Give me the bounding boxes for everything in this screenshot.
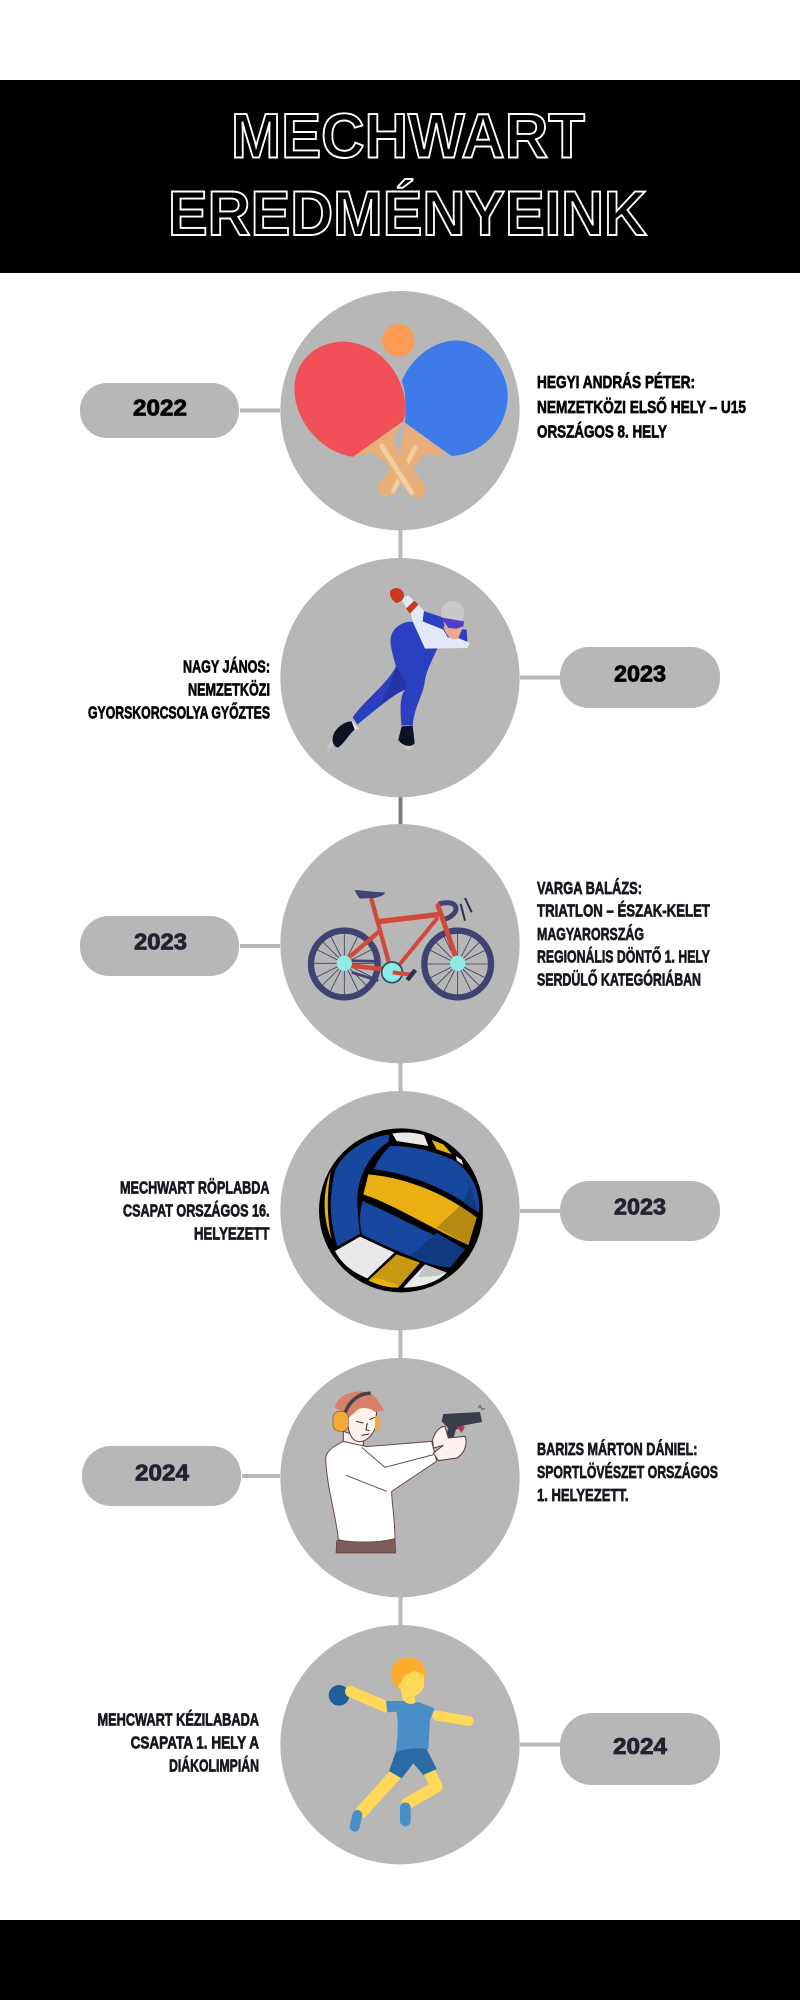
text: Mechwart röplabda: CSAPAT ORSZÁGOS 16. [123,1200,270,1220]
title: EREDMÉNYEINK [168,179,647,249]
title [168,102,647,249]
year pill 2022 [80,383,239,438]
text: Hegyi András Péter: ORSZÁGOS 8. HELY [537,421,667,442]
text: Barizs Márton Dániel: SPORTLÖVÉSZET ORSZÁGOS [537,1461,718,1482]
circle with table tennis icon [280,291,520,530]
text: Varga Balázs: REGIONÁLIS DÖNTŐ 1. HELY [537,946,710,967]
circle with bicycle icon [280,824,520,1063]
text: Mehcwart kézilabada: DIÁKOLIMPIÁN [169,1754,259,1776]
panel: 2023 volleyball [120,1091,720,1330]
year pill 2022: 2022 [133,394,187,420]
text: Nagy János: GYORSKORCSOLYA GYŐZTES [88,702,270,722]
year pill 2023: 2023 [134,928,187,954]
year pill 2023 [560,1181,720,1241]
text: Hegyi András Péter: NEMZETKÖZI ELSŐ HELY – U15 [537,396,746,417]
panel: 2023 triathlon [80,824,710,1063]
circle with handball player icon [280,1625,520,1864]
footer band [0,1920,800,2000]
text: Nagy János [88,656,270,722]
text: Mehcwart kézilabada [98,1708,259,1776]
text: Barizs Márton Dániel: BARIZS MÁRTON DÁNIEL: [537,1438,698,1459]
circle with volleyball icon [280,1091,520,1330]
panel: 2022 table tennis [80,291,746,530]
year pill 2024 [82,1446,241,1506]
year pill 2024: 2024 [613,1733,667,1759]
year pill 2023: 2023 [614,1194,666,1220]
title: MECHWART [231,102,585,172]
text: Mehcwart kézilabada: MEHCWART KÉZILABADA [98,1708,259,1730]
circle with speed skater icon [280,558,520,797]
text: Mechwart röplabda [120,1178,270,1244]
circle with shooter icon [280,1358,520,1597]
text: Varga Balázs: SERDÜLŐ KATEGÓRIÁBAN [537,969,701,990]
panel: 2023 speed skating [88,558,720,797]
text: Varga Balázs [537,877,710,990]
year pill 2024: 2024 [135,1460,189,1486]
text: Mechwart röplabda: MECHWART RÖPLABDA [120,1178,270,1198]
text: Nagy János: NAGY JÁNOS: [183,656,270,676]
text: Mechwart röplabda: HELYEZETT [194,1224,270,1244]
text: Mehcwart kézilabada: CSAPATA 1. HELY A [131,1732,259,1752]
text: Hegyi András Péter [537,371,746,442]
text: Hegyi András Péter: HEGYI ANDRÁS PÉTER: [537,371,695,392]
text: Barizs Márton Dániel [537,1438,718,1505]
text: Varga Balázs: TRIATLON – ÉSZAK-KELET [537,900,710,921]
text: Nagy János: NEMZETKÖZI [188,680,270,700]
year pill 2023 [560,647,720,708]
text: Varga Balázs: VARGA BALÁZS: [537,877,642,898]
panel: 2024 sport shooting [82,1358,718,1597]
text: Varga Balázs: MAGYARORSZÁG [537,923,644,944]
year pill 2023: 2023 [614,661,666,687]
year pill 2023 [80,916,239,976]
panel: 2024 handball [98,1625,720,1864]
header band with title [0,80,800,273]
timeline connectors [240,408,560,1746]
text: Barizs Márton Dániel: 1. HELYEZETT. [537,1485,628,1505]
year pill 2024 [560,1713,720,1785]
